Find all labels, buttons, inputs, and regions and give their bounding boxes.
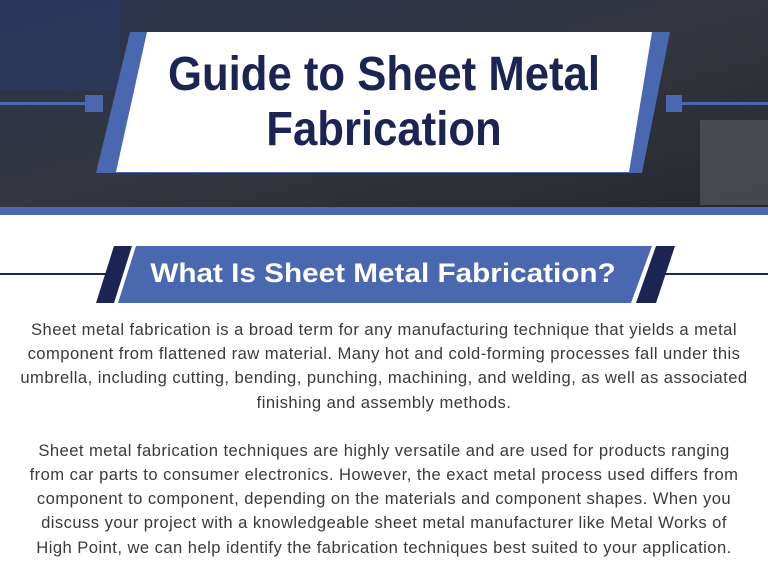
paragraph 2: High Point, we can help identify the fabrication techniques best suited to your application. [36,538,732,557]
paragraph 1 [20,320,748,412]
title box [85,32,682,173]
title text: Fabrication [266,103,502,156]
body text [20,320,748,557]
paragraph 2: discuss your project with a knowledgeable sheet metal manufacturer like Metal Works of [41,513,727,532]
paragraph 1: Sheet metal fabrication is a broad term for any manufacturing technique that yields a metal [31,320,737,339]
paragraph 1: finishing and assembly methods. [257,393,511,412]
paragraph 2: component to component, depending on the materials and component shapes. When you [37,489,731,508]
title text: Guide to Sheet Metal [168,48,600,101]
paragraph 2 [30,441,738,557]
paragraph 1: umbrella, including cutting, bending, punching, machining, and welding, as well as associated [20,368,748,387]
paragraph 2: Sheet metal fabrication techniques are highly versatile and are used for products ranging [38,441,730,460]
paragraph 1: component from flattened raw material. Many hot and cold-forming processes fall under this [28,344,740,363]
heading text: What Is Sheet Metal Fabrication? [150,258,616,288]
title text [168,48,600,156]
heading banner [0,246,768,303]
header background [0,0,768,215]
paragraph 2: from car parts to consumer electronics. However, the exact metal process used differs from [30,465,738,484]
